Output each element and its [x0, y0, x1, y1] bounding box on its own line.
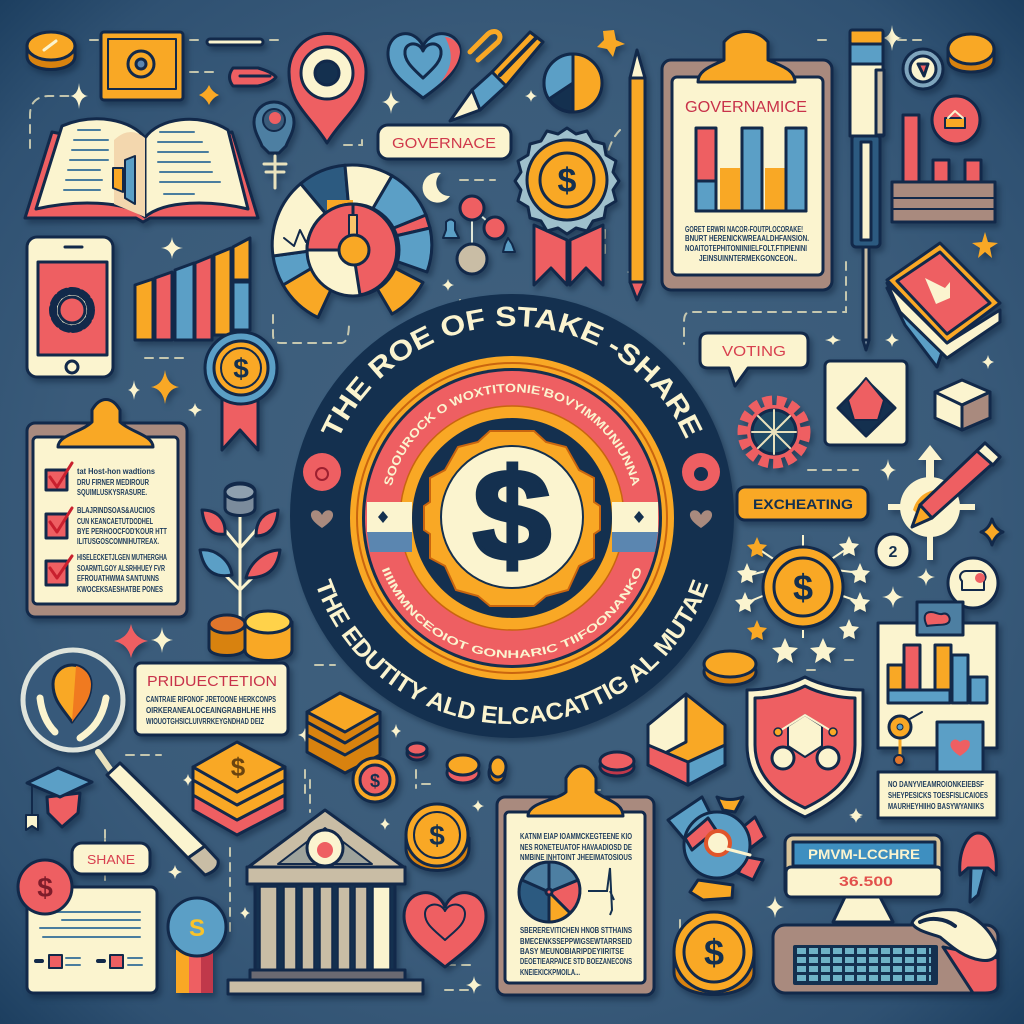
checklist text 3: SOARMTLGOY ALSRHHUEY FVR	[77, 564, 165, 573]
checklist text 1	[77, 467, 156, 497]
screen number: 36.500	[839, 873, 893, 889]
icon: small coral coin: $	[370, 771, 380, 791]
right banner tab	[612, 502, 658, 532]
label: share: SHANE	[87, 852, 135, 867]
icon: small coins	[407, 743, 506, 783]
icon: bank building	[228, 810, 423, 994]
icon: crosshair with pencil	[888, 443, 1000, 560]
bar chart: slanted bars	[135, 238, 250, 340]
icon: small medal: $	[233, 353, 249, 384]
body text: NOAITOTEPHITONIINIIELFOLT.FTIPIENINI	[685, 244, 807, 253]
panel: production card	[135, 663, 288, 735]
icon: pie	[544, 54, 602, 112]
body text bottom: DEOETIEARPAICE STD BOEZANECONS	[520, 957, 632, 966]
bar chart	[696, 128, 806, 211]
icon: blue badge	[903, 49, 943, 89]
clip	[528, 766, 623, 816]
icon: key	[889, 712, 922, 765]
icon: moon	[423, 173, 450, 203]
checklist text 3: EFROUATHWMA SANTUNNS	[77, 574, 159, 583]
icon: coral capsule	[600, 752, 634, 776]
body text: CANTRAIE RIFONOF JRETOONE HERKCONPS	[146, 695, 276, 704]
body text: OIRKERANEALOCEAINGRABHLHE HHS	[146, 706, 277, 715]
icon: tall pencil	[630, 50, 645, 300]
heading: PRIDUECTETION	[147, 673, 277, 690]
icon: screwdriver pen	[850, 30, 884, 350]
icon: coral pin	[960, 833, 996, 902]
icon: diamond card	[825, 361, 907, 445]
icon: magnifier	[23, 650, 218, 875]
icon: medal	[515, 128, 619, 285]
icon: blue coin with ribbon	[168, 898, 226, 993]
icon: side coin	[704, 651, 756, 685]
icon: key bulb	[254, 102, 294, 188]
icon: safe box	[101, 32, 183, 100]
mouse hand	[912, 910, 998, 993]
icon: target gear	[668, 797, 765, 900]
icon: stacked gold box	[193, 742, 285, 835]
icon: gold coin	[406, 804, 469, 870]
gear	[424, 431, 600, 606]
panel: checklist clipboard	[27, 400, 187, 617]
chart: segmented wheel	[272, 165, 432, 318]
body text bottom: BASY MEUNOBIARIPDEYIIRITSE	[520, 947, 625, 956]
icon: coral circle badge	[932, 96, 980, 144]
icon: computer with keyboard	[773, 835, 998, 993]
checkbox 1	[46, 463, 72, 490]
clip	[698, 32, 795, 82]
icon: shield	[747, 677, 863, 817]
ring text upper: SOOUROCK O WOXTITONIE'BOVYIMMUNIUNNA	[384, 384, 640, 486]
dollar sign: $	[473, 443, 551, 588]
body text top: KATNM EIAP IOAMMCKEGTEENE KIO	[520, 832, 632, 841]
icon: coral coin	[18, 860, 72, 914]
pie chart	[519, 862, 580, 922]
icon: big coin	[674, 912, 754, 994]
body text	[146, 695, 277, 726]
icon: cube	[935, 380, 990, 430]
icon: orange sparkle	[981, 519, 1003, 545]
icon: gold coin: $	[429, 820, 445, 851]
body text: WIOUOTGHSICLUIVRRKEYGNDHAD DEIZ	[146, 717, 264, 726]
icon: map pin	[289, 34, 366, 143]
body text bottom: KNEIEKICKPMOILA...	[520, 968, 580, 977]
screen title: PMVM-LCCHRE	[808, 846, 920, 862]
icon: coral coin: $	[37, 872, 53, 903]
panel: stacked cards	[887, 243, 1000, 367]
body text bottom	[520, 926, 633, 977]
body text top	[520, 832, 633, 862]
body text: JEINSUINNTERMEKGONCEON..	[699, 254, 797, 263]
checklist text 2: CUN KEANCAETUTDODHEL	[77, 517, 153, 526]
checklist text 2: BYE PERHOOCFOD'KOUR HTT	[77, 527, 167, 536]
speech icon	[917, 602, 963, 635]
monitor	[785, 835, 942, 922]
icon: star	[597, 30, 625, 57]
panel: text card: SHEYPESICKS TOESFISLICAIOES	[888, 791, 989, 800]
body text bottom: BMECENKSSEPPWIGSEWTARRSEID	[520, 937, 632, 946]
icon: coin stack	[307, 693, 380, 773]
checklist text 1: SQUIMLUSKYSRASURE.	[77, 488, 147, 497]
icon: numbered circle: 2	[889, 544, 898, 561]
icon: paperclip	[470, 32, 500, 60]
body text: GORET ERWRI NACOR-FOUTPLOCORAKE!	[685, 225, 803, 234]
title arc: THE ROE OF STAKE -SHARE	[320, 306, 703, 439]
clip	[58, 400, 153, 447]
icon: hex box	[648, 694, 725, 785]
label: governance	[378, 125, 511, 159]
body text bottom: SBEREREVITICHEN HNOB STTHAINS	[520, 926, 633, 935]
heading: GOVERNAMICE	[685, 99, 807, 116]
checkbox 2	[46, 508, 72, 538]
checkbox 3	[46, 556, 72, 585]
body text top: NMBINE INHTOINT JHEEIMATOSIOUS	[520, 853, 633, 862]
label: voting: VOTING	[722, 343, 786, 360]
icon: molecule	[443, 196, 515, 274]
label: governance: GOVERNACE	[392, 135, 496, 152]
right badges	[682, 453, 720, 528]
central emblem	[250, 254, 774, 778]
icon: small coral coin	[353, 758, 397, 802]
panel: bottom clipboard	[497, 766, 654, 995]
icon: numbered circle	[876, 534, 910, 568]
panel: text card: NO DANYVIEAMROIONKEIEBSF	[888, 780, 984, 789]
icon: coin with rays	[735, 535, 870, 663]
left badges	[303, 453, 341, 528]
icon: red diamond sparkle	[114, 624, 148, 658]
subtitle arc: THE EDUTITY ALD ELCACATTIG AL MUTAE	[317, 578, 708, 724]
label: voting	[700, 333, 808, 386]
label: exchange: EXCHEATING	[753, 496, 853, 512]
checklist text 2: BLAJRINDSOAS&AUCIIOS	[77, 506, 156, 515]
label: share	[72, 843, 150, 874]
checklist text 1: tat Host-hon wadtions	[77, 467, 156, 476]
coin ring	[350, 356, 674, 680]
left banner tab	[367, 502, 412, 532]
icon: small chart tablet	[937, 722, 983, 772]
icon: small star	[151, 370, 179, 404]
checklist text 2	[77, 506, 167, 546]
checklist text 3	[77, 553, 167, 594]
icon: bread bubble	[948, 558, 998, 608]
icon: pen	[450, 32, 543, 121]
checklist text 2: ILITUSGOSCOMNIHUTREAX.	[77, 537, 159, 546]
icon: plant with coins	[200, 483, 292, 660]
panel: text card: MAURHEYHIIHO BASYWYANIIKS	[888, 802, 984, 811]
checklist text 1: DRU FIRNER MEDIROUR	[77, 478, 149, 487]
bar chart: right bars	[892, 115, 995, 222]
icon: coin with rays: $	[793, 567, 813, 608]
icon: coin top right	[948, 34, 994, 72]
panel: text card	[878, 772, 997, 818]
keyboard	[773, 925, 998, 993]
icon: cream bar	[207, 39, 263, 45]
ring text lower: IIIIMMNCEOIOT GONHARIC TIIFOONANKO	[382, 567, 641, 658]
icon: phone with gear	[27, 237, 113, 377]
body text top: NES RONETEUATOF HAVAADIOSD DE	[520, 843, 632, 852]
icon: coral gear	[743, 401, 805, 463]
bar chart	[888, 645, 987, 703]
panel: share note	[27, 887, 157, 993]
checklist text 3: KWOCEKSAESHATBE PONES	[77, 585, 163, 594]
icon: capsule	[230, 68, 276, 86]
icon: graduation cap	[26, 768, 92, 830]
icon: open book	[25, 119, 258, 222]
icon: stacked gold box: $	[231, 752, 246, 782]
icon: orange star right	[972, 232, 998, 258]
icon: coral heart	[404, 893, 486, 967]
body text	[685, 225, 809, 263]
icon: blue coin with ribbon: S	[189, 915, 205, 942]
panel: chart card	[878, 602, 997, 765]
icon: coin top left	[27, 32, 75, 70]
icon: small medal	[205, 332, 277, 450]
icon: medal: $	[558, 162, 577, 200]
panel: governance clipboard	[662, 32, 832, 290]
icon: lightning tick	[588, 868, 614, 915]
checklist text 3: HISELECKETJLGEN MUTHERGHA	[77, 553, 167, 562]
body text: BNURT HERENICKWREAALDHFANSION.	[685, 234, 809, 243]
icon: big coin: $	[704, 932, 724, 973]
icon: orange diamond star	[199, 85, 219, 105]
label: exchange	[737, 487, 868, 520]
icon: heart	[388, 34, 460, 98]
